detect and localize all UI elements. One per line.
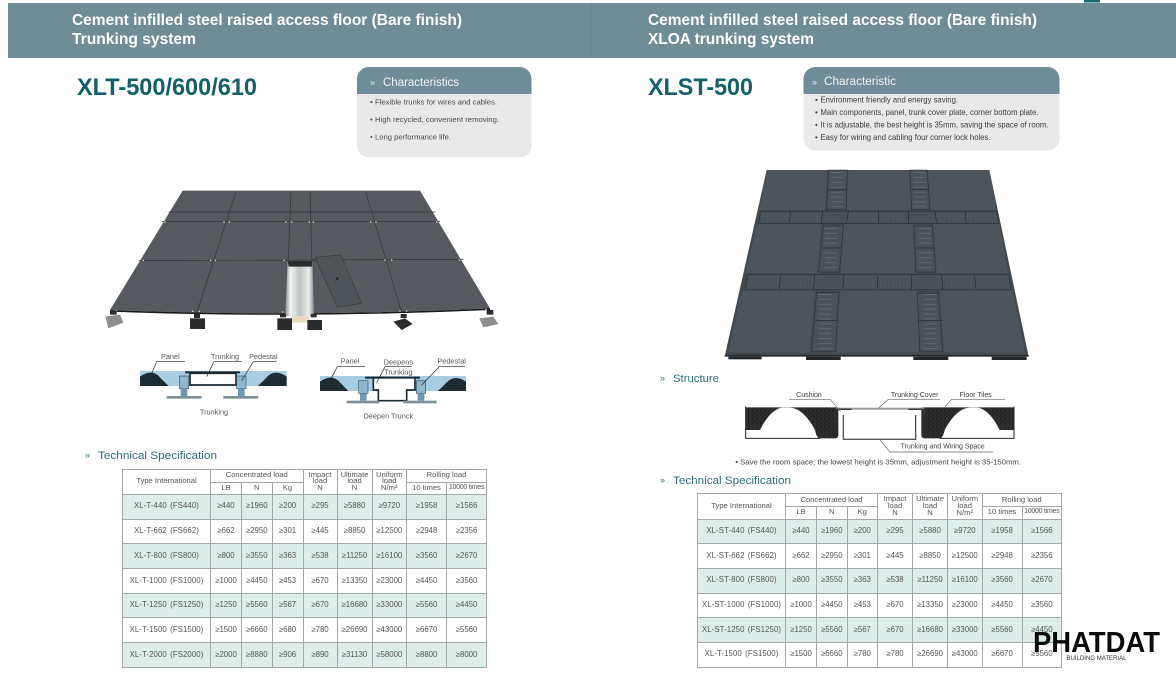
right pedestal [403, 381, 437, 403]
panel: right characteristics: Environment friendly and energy saving. [820, 96, 958, 104]
table: left technical specification: ≥8800 [416, 650, 437, 659]
table: left technical specification: ≥1500 [215, 625, 237, 634]
table: right technical specification: ≥16680 [917, 625, 943, 634]
table: right technical specification: ≥567 [854, 625, 871, 634]
table: right technical specification: ≥23000 [952, 600, 978, 609]
table: right technical specification: XL-ST-800 (FS800) [706, 575, 777, 584]
panel: left characteristics: Flexible trunks for wires and cables. [375, 98, 497, 106]
table: left technical specification: ≥780 [311, 625, 329, 634]
table: left technical specification: N/m² [381, 483, 397, 492]
section heading: left technical specification: Technical Specification [98, 450, 217, 462]
table: left technical specification: LB [221, 483, 231, 492]
table: left technical specification: ≥5880 [344, 501, 365, 510]
panel: left characteristics [357, 67, 532, 158]
title: left model: XLT-500/600/610 [77, 74, 257, 101]
table: right technical specification: ≥3560 [1031, 600, 1053, 609]
title: right model: XLST-500 [648, 74, 753, 101]
table: right technical specification: ≥33000 [952, 625, 978, 634]
table: right technical specification: ≥5560 [821, 625, 843, 634]
table: left technical specification: load [382, 476, 396, 485]
table: left technical specification: ≥295 [311, 501, 329, 510]
table: right technical specification: ≥662 [792, 551, 810, 560]
table: left technical specification: ≥9720 [378, 501, 400, 510]
table: right technical specification: ≥4450 [991, 600, 1013, 609]
structure note: • Save the room space, the lowest height is 35mm, adjustment height is 35-150mm. [735, 460, 1021, 467]
table: left technical specification: ≥1000 [215, 576, 237, 584]
table: left technical specification: load [313, 476, 327, 485]
table: left technical specification: ≥4450 [456, 600, 477, 609]
table: right technical specification: ≥4450 [821, 600, 843, 609]
table: right technical specification [697, 493, 1062, 668]
panel: left characteristics: Characteristics [383, 77, 459, 89]
chart: trunking cross-section diagram: Trunking [211, 352, 239, 361]
table: left technical specification: XL-T-800 (FS800) [134, 551, 199, 560]
table: left technical specification: ≥23000 [376, 576, 402, 584]
table: left technical specification: ≥890 [311, 650, 329, 659]
table: right technical specification: ≥8850 [919, 551, 941, 560]
table: left technical specification: XL-T-440 (FS440) [134, 501, 199, 510]
table: right technical specification: ≥445 [886, 551, 904, 560]
table: left technical specification: ≥1566 [456, 501, 477, 510]
table: left technical specification: ≥680 [279, 625, 296, 634]
table: left technical specification: N [317, 483, 323, 492]
table: left technical specification: Ultimate [341, 470, 368, 479]
panel: left characteristics: Long performance life. [375, 132, 451, 142]
logo: PHATDAT building material: BUILDING MATERIAL [1066, 656, 1127, 662]
table: right technical specification: ≥6660 [821, 649, 843, 658]
table: right technical specification: 10000 times [1024, 508, 1059, 515]
section heading: left technical specification: » [85, 450, 90, 460]
table: right technical specification: ≥2950 [821, 551, 843, 560]
table: right technical specification: Type International [711, 501, 772, 510]
chart: deepen trunk cross-section diagram: Deepens [384, 358, 413, 367]
table: left technical specification: load [347, 476, 362, 485]
table: right technical specification: ≥26690 [917, 649, 943, 658]
table: left technical specification: ≥363 [279, 551, 296, 560]
table: left technical specification: ≥16100 [376, 551, 402, 560]
table: left technical specification: ≥8850 [344, 526, 365, 535]
heading: left system title [72, 12, 462, 48]
table: right technical specification: ≥16100 [952, 575, 978, 584]
table: left technical specification: ≥1960 [246, 501, 268, 510]
chart: deepen trunk cross-section diagram: Panel [341, 357, 360, 366]
table: left technical specification: ≥1958 [416, 501, 437, 510]
table: left technical specification: ≥6670 [416, 625, 437, 634]
table: right technical specification: ≥1566 [1031, 526, 1053, 535]
table: left technical specification: ≥301 [279, 526, 296, 535]
header band [8, 3, 1176, 58]
table: left technical specification: ≥3560 [456, 576, 477, 584]
panel: left characteristics: High recycled, convenient removing. [375, 115, 499, 124]
table: left technical specification: ≥12500 [376, 526, 402, 535]
table: left technical specification: ≥1250 [215, 600, 237, 609]
table: right technical specification: ≥2948 [991, 551, 1013, 560]
table: left technical specification: Impact [309, 470, 331, 479]
table: left technical specification: ≥58000 [376, 650, 402, 659]
table: left technical specification: ≥2670 [456, 551, 477, 560]
table: left technical specification: Rolling load [427, 470, 466, 479]
chart: trunking cross-section diagram: Trunking [200, 408, 228, 417]
chart: deepen trunk cross-section diagram [320, 357, 466, 421]
heading: right system title: Cement infilled steel raised access floor (Bare finish) [648, 12, 1037, 29]
section heading: right technical specification: » [660, 475, 665, 485]
table: right technical specification: XL-T-1500 (FS1500) [705, 649, 778, 658]
chart: right floor product illustration [724, 170, 1029, 360]
table: left technical specification: XL-T-2000 (FS2000) [130, 650, 203, 659]
table: right technical specification: Ultimate [916, 494, 944, 503]
panel corner fasteners [115, 221, 487, 313]
table: left technical specification: ≥453 [279, 576, 296, 584]
trunk joint seams [779, 189, 976, 321]
chart: trunking cross-section diagram: Pedestal [249, 352, 278, 361]
table: left technical specification: ≥440 [217, 501, 235, 510]
table: left technical specification: ≥670 [311, 576, 329, 584]
table: left technical specification: ≥670 [311, 600, 329, 609]
chart: XLOA structure cross-section diagram: Trunking and Wiring Space [901, 443, 985, 450]
table: right technical specification: 10 times [988, 507, 1016, 516]
table: left technical specification: ≥3550 [246, 551, 268, 560]
panel: left characteristics: • [370, 132, 373, 142]
table: right technical specification: Impact [884, 494, 906, 503]
table: right technical specification: ≥2356 [1031, 551, 1053, 560]
logo: PHATDAT building material: PHATDAT [1033, 627, 1160, 659]
section heading: right technical specification: Technical Specification [673, 475, 791, 487]
table: left technical specification: ≥5560 [246, 600, 268, 609]
table: right technical specification: ≥670 [886, 600, 904, 609]
table: right technical specification: ≥3550 [821, 575, 843, 584]
table: left technical specification: N [352, 483, 357, 492]
panel: right characteristics [804, 67, 1060, 150]
table: left technical specification: ≥6660 [246, 625, 268, 634]
trunking cover [835, 408, 925, 417]
table: right technical specification: ≥11250 [917, 575, 943, 584]
table: left technical specification: ≥5560 [456, 625, 477, 634]
table: left technical specification: N [254, 483, 259, 492]
heading: left system title: Trunking system [72, 31, 196, 48]
table: right technical specification: XL-ST-662 (FS662) [706, 551, 777, 560]
table: right technical specification: load [923, 501, 937, 510]
chart: deepen trunk cross-section diagram: Pedestal [437, 357, 466, 366]
table: right technical specification: Kg [858, 507, 867, 516]
table: right technical specification: load [958, 501, 972, 510]
panel: right characteristics: • [815, 120, 818, 130]
left pedestal [347, 381, 379, 403]
table: right technical specification: ≥200 [854, 526, 871, 535]
table: right technical specification: ≥1250 [790, 625, 812, 634]
table: right technical specification: ≥6670 [991, 649, 1013, 658]
table: right technical specification: N [892, 508, 898, 517]
table: left technical specification: ≥445 [311, 526, 329, 535]
removed trunk cover [315, 255, 362, 307]
table: right technical specification: ≥43000 [952, 649, 978, 658]
table: left technical specification [122, 468, 487, 668]
table: right technical specification: N [927, 508, 933, 517]
table: right technical specification: LB [796, 507, 806, 516]
table: left technical specification: ≥8880 [246, 650, 268, 659]
chart: XLOA structure cross-section diagram: Cushion [796, 392, 822, 399]
table: right technical specification: N/m² [957, 508, 973, 517]
heading: right system title: XLOA trunking system [648, 31, 814, 48]
table: left technical specification: ≥4450 [246, 576, 268, 584]
heading: right system title [648, 12, 1037, 48]
table: left technical specification: ≥2950 [246, 526, 268, 535]
table: left technical specification: ≥33000 [376, 600, 402, 609]
table: left technical specification: ≥200 [279, 501, 296, 510]
table: left technical specification: ≥5560 [416, 600, 437, 609]
right pedestal [223, 376, 258, 399]
table: right technical specification: XL-ST-1250 (FS1250) [702, 625, 781, 634]
table: left technical specification: ≥3560 [416, 551, 437, 560]
table: left technical specification: Type International [136, 476, 197, 485]
panel: right characteristics: It is adjustable, the best height is 35mm, saving the space of room. [820, 120, 1048, 130]
table: right technical specification: ≥295 [886, 526, 904, 535]
table: right technical specification: ≥9720 [954, 526, 976, 535]
table: left technical specification: 10 times [412, 483, 441, 492]
chart: trunking cross-section diagram [140, 352, 287, 417]
table: left technical specification: XL-T-1500 (FS1500) [130, 625, 203, 634]
table: right technical specification: ≥440 [792, 526, 810, 535]
chart: trunking cross-section diagram: Panel [161, 352, 180, 361]
table: right technical specification: ≥2670 [1031, 575, 1053, 584]
chart: XLOA structure cross-section diagram: Floor Tiles [960, 392, 992, 399]
left pedestal [167, 376, 202, 399]
trunk rungs [825, 172, 930, 351]
table: right technical specification: ≥3560 [991, 575, 1013, 584]
table: right technical specification: ≥800 [792, 575, 810, 584]
panel: right characteristics: Main components, panel, trunk cover plate, corner bottom plate. [820, 108, 1038, 117]
table: left technical specification: ≥538 [311, 551, 329, 560]
table: right technical specification: ≥13350 [917, 600, 943, 609]
panel: left characteristics: • [370, 98, 373, 106]
table: right technical specification: ≥1958 [991, 526, 1013, 535]
table: right technical specification: XL-ST-1000 (FS1000) [702, 600, 781, 609]
trunk channel [843, 415, 916, 439]
table: right technical specification: ≥5560 [991, 625, 1013, 634]
panel: right characteristics: • [815, 96, 818, 104]
panel: left characteristics: » [370, 78, 375, 88]
panel: right characteristics: • [815, 133, 818, 142]
panel: right characteristics: • [815, 108, 818, 117]
chart: XLOA structure cross-section diagram: Trunking Cover [891, 392, 939, 399]
table: right technical specification: ≥453 [854, 600, 871, 609]
table: right technical specification: N [829, 507, 834, 516]
table: right technical specification: ≥363 [854, 575, 871, 584]
table: right technical specification: ≥4450 [1031, 625, 1053, 634]
pedestal feet [105, 310, 498, 330]
table: right technical specification: XL-ST-440 (FS440) [706, 526, 777, 535]
table: right technical specification: ≥5880 [919, 526, 941, 535]
chart: deepen trunk cross-section diagram: Trunking [384, 367, 412, 376]
table: left technical specification: XL-T-1250 (FS1250) [130, 600, 203, 609]
table: left technical specification: Concentrated load [226, 470, 288, 479]
table: left technical specification: ≥13350 [342, 576, 368, 584]
table: left technical specification: ≥2356 [456, 526, 477, 535]
table: right technical specification: Concentrated load [800, 495, 863, 504]
chart: deepen trunk cross-section diagram: Deepen Trunck [363, 412, 414, 421]
table: left technical specification: ≥16680 [342, 600, 368, 609]
table: right technical specification: load [888, 501, 902, 510]
table: left technical specification: XL-T-662 (FS662) [134, 526, 199, 535]
section heading: structure: Structure [673, 373, 719, 385]
table: left technical specification: ≥26690 [342, 625, 368, 634]
support feet [728, 357, 1027, 360]
table: left technical specification: ≥31130 [342, 650, 367, 659]
table: left technical specification: ≥2000 [215, 650, 237, 659]
table: right technical specification: ≥1960 [821, 526, 843, 535]
table: right technical specification: ≥301 [854, 551, 871, 560]
section heading: structure: » [660, 373, 665, 383]
table: left technical specification: XL-T-1000 (FS1000) [130, 576, 203, 584]
table: right technical specification: ≥670 [886, 625, 904, 634]
table: right technical specification: ≥538 [886, 575, 904, 584]
panel: left characteristics: • [370, 115, 373, 124]
table: right technical specification: ≥5560 [1031, 649, 1053, 658]
panel: right characteristics: » [812, 77, 817, 87]
table: left technical specification: ≥4450 [416, 576, 437, 584]
table: left technical specification: ≥43000 [376, 625, 402, 634]
table: left technical specification: Uniform [376, 470, 403, 479]
trunk covers [745, 170, 1011, 352]
table: right technical specification: ≥12500 [952, 551, 978, 560]
table: left technical specification: ≥11250 [342, 551, 367, 560]
table: right technical specification: ≥780 [886, 649, 904, 658]
table: left technical specification: ≥906 [279, 650, 296, 659]
table: left technical specification: ≥2948 [416, 526, 437, 535]
table: right technical specification: Uniform [951, 494, 978, 503]
table: left technical specification: ≥800 [217, 551, 235, 560]
panel: right characteristics: Characteristic [824, 76, 896, 88]
heading: left system title: Cement infilled steel raised access floor (Bare finish) [72, 12, 462, 29]
icon: cropped teal mark at top edge [1084, 0, 1100, 2]
panel: right characteristics: Easy for wiring and cabling four corner lock holes. [820, 133, 990, 142]
table: left technical specification: Kg [283, 483, 292, 492]
trunk opening [285, 261, 314, 323]
table: left technical specification: ≥662 [217, 526, 235, 535]
chart: left floor product illustration [105, 191, 498, 330]
table: right technical specification: ≥1500 [790, 649, 812, 658]
table: left technical specification: 10000 times [449, 484, 484, 491]
table: right technical specification: Rolling load [1002, 495, 1042, 504]
table: left technical specification: ≥8000 [456, 650, 477, 659]
table: right technical specification: ≥780 [854, 649, 871, 658]
table: right technical specification: ≥1000 [790, 600, 812, 609]
table: left technical specification: ≥567 [279, 600, 296, 609]
chart: XLOA structure cross-section diagram [735, 392, 1021, 467]
